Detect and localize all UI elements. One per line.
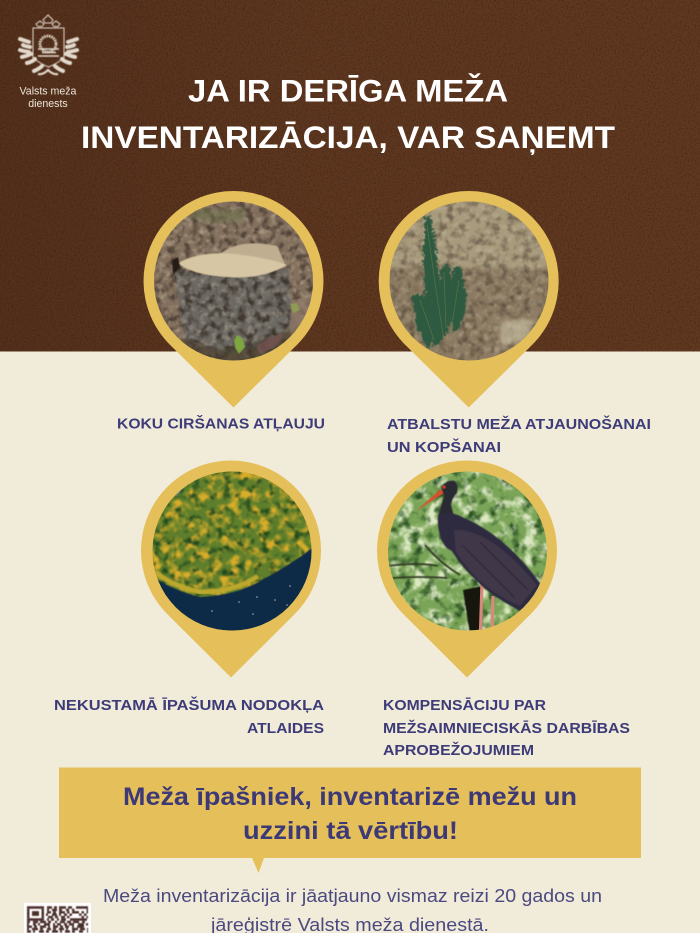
body text bbox=[103, 886, 602, 933]
label: nekustama ipasuma nodokla atlaides bbox=[54, 696, 324, 737]
label: atbalstu meza atjaunosanai un kopsanai: ATBALSTU MEŽA ATJAUNOŠANAI bbox=[387, 415, 651, 433]
icon: coat of arms bbox=[20, 15, 77, 74]
photo: aerial forest and lake bbox=[152, 472, 312, 630]
logo wordmark: dienests bbox=[28, 98, 68, 110]
panel: atbalstu meza atjaunosanai bbox=[379, 191, 559, 408]
label: nekustama ipasuma nodokla atlaides: ATLAIDES bbox=[247, 720, 324, 737]
callout banner bbox=[59, 768, 641, 873]
label: kompensaciju par mezsaimnieciskas darbibas aprobezojumiem bbox=[383, 697, 630, 759]
photo: young spruce sapling bbox=[390, 202, 548, 360]
body text: Meža inventarizācija ir jāatjauno vismaz reizi 20 gados un bbox=[103, 886, 602, 906]
callout text: Meža īpašniek, inventarizē mežu un bbox=[123, 783, 577, 811]
panel: koku cirsanas atlauju bbox=[143, 191, 323, 408]
pin marker bbox=[379, 191, 559, 408]
label: kompensaciju par mezsaimnieciskas darbibas aprobezojumiem: KOMPENSĀCIJU PAR bbox=[383, 697, 546, 714]
callout text bbox=[123, 783, 577, 845]
logo wordmark bbox=[20, 86, 77, 110]
label: kompensaciju par mezsaimnieciskas darbibas aprobezojumiem: MEŽSAIMNIECISKĀS DARBĪBAS bbox=[383, 719, 630, 737]
label: atbalstu meza atjaunosanai un kopsanai bbox=[387, 415, 651, 456]
brown leather header band bbox=[0, 0, 700, 352]
panel: kompensaciju bbox=[377, 461, 557, 678]
title: JA IR DERĪGA MEŽA bbox=[188, 72, 508, 108]
speech bubble bbox=[59, 768, 641, 873]
pin marker bbox=[141, 461, 321, 678]
logo wordmark: Valsts meža bbox=[20, 86, 77, 98]
photo: tree stump bbox=[154, 202, 313, 360]
label: atbalstu meza atjaunosanai un kopsanai: UN KOPŠANAI bbox=[387, 438, 501, 456]
QR code bbox=[24, 903, 91, 933]
pin marker bbox=[377, 461, 557, 678]
logo: Valsts meža dienests bbox=[20, 15, 77, 110]
pin marker bbox=[143, 191, 323, 408]
label: kompensaciju par mezsaimnieciskas darbibas aprobezojumiem: APROBEŽOJUMIEM bbox=[383, 741, 534, 759]
title: INVENTARIZĀCIJA, VAR SAŅEMT bbox=[81, 119, 615, 155]
callout text: uzzini tā vērtību! bbox=[243, 817, 458, 845]
label: nekustama ipasuma nodokla atlaides: NEKUSTAMĀ ĪPAŠUMA NODOKĻA bbox=[54, 696, 324, 714]
label: koku cirsanas atlauju: KOKU CIRŠANAS ATĻAUJU bbox=[117, 414, 325, 432]
photo: black stork in forest bbox=[385, 468, 550, 634]
panel: nekustama ipasuma nodokla atlaides bbox=[141, 461, 321, 678]
title bbox=[81, 72, 615, 155]
